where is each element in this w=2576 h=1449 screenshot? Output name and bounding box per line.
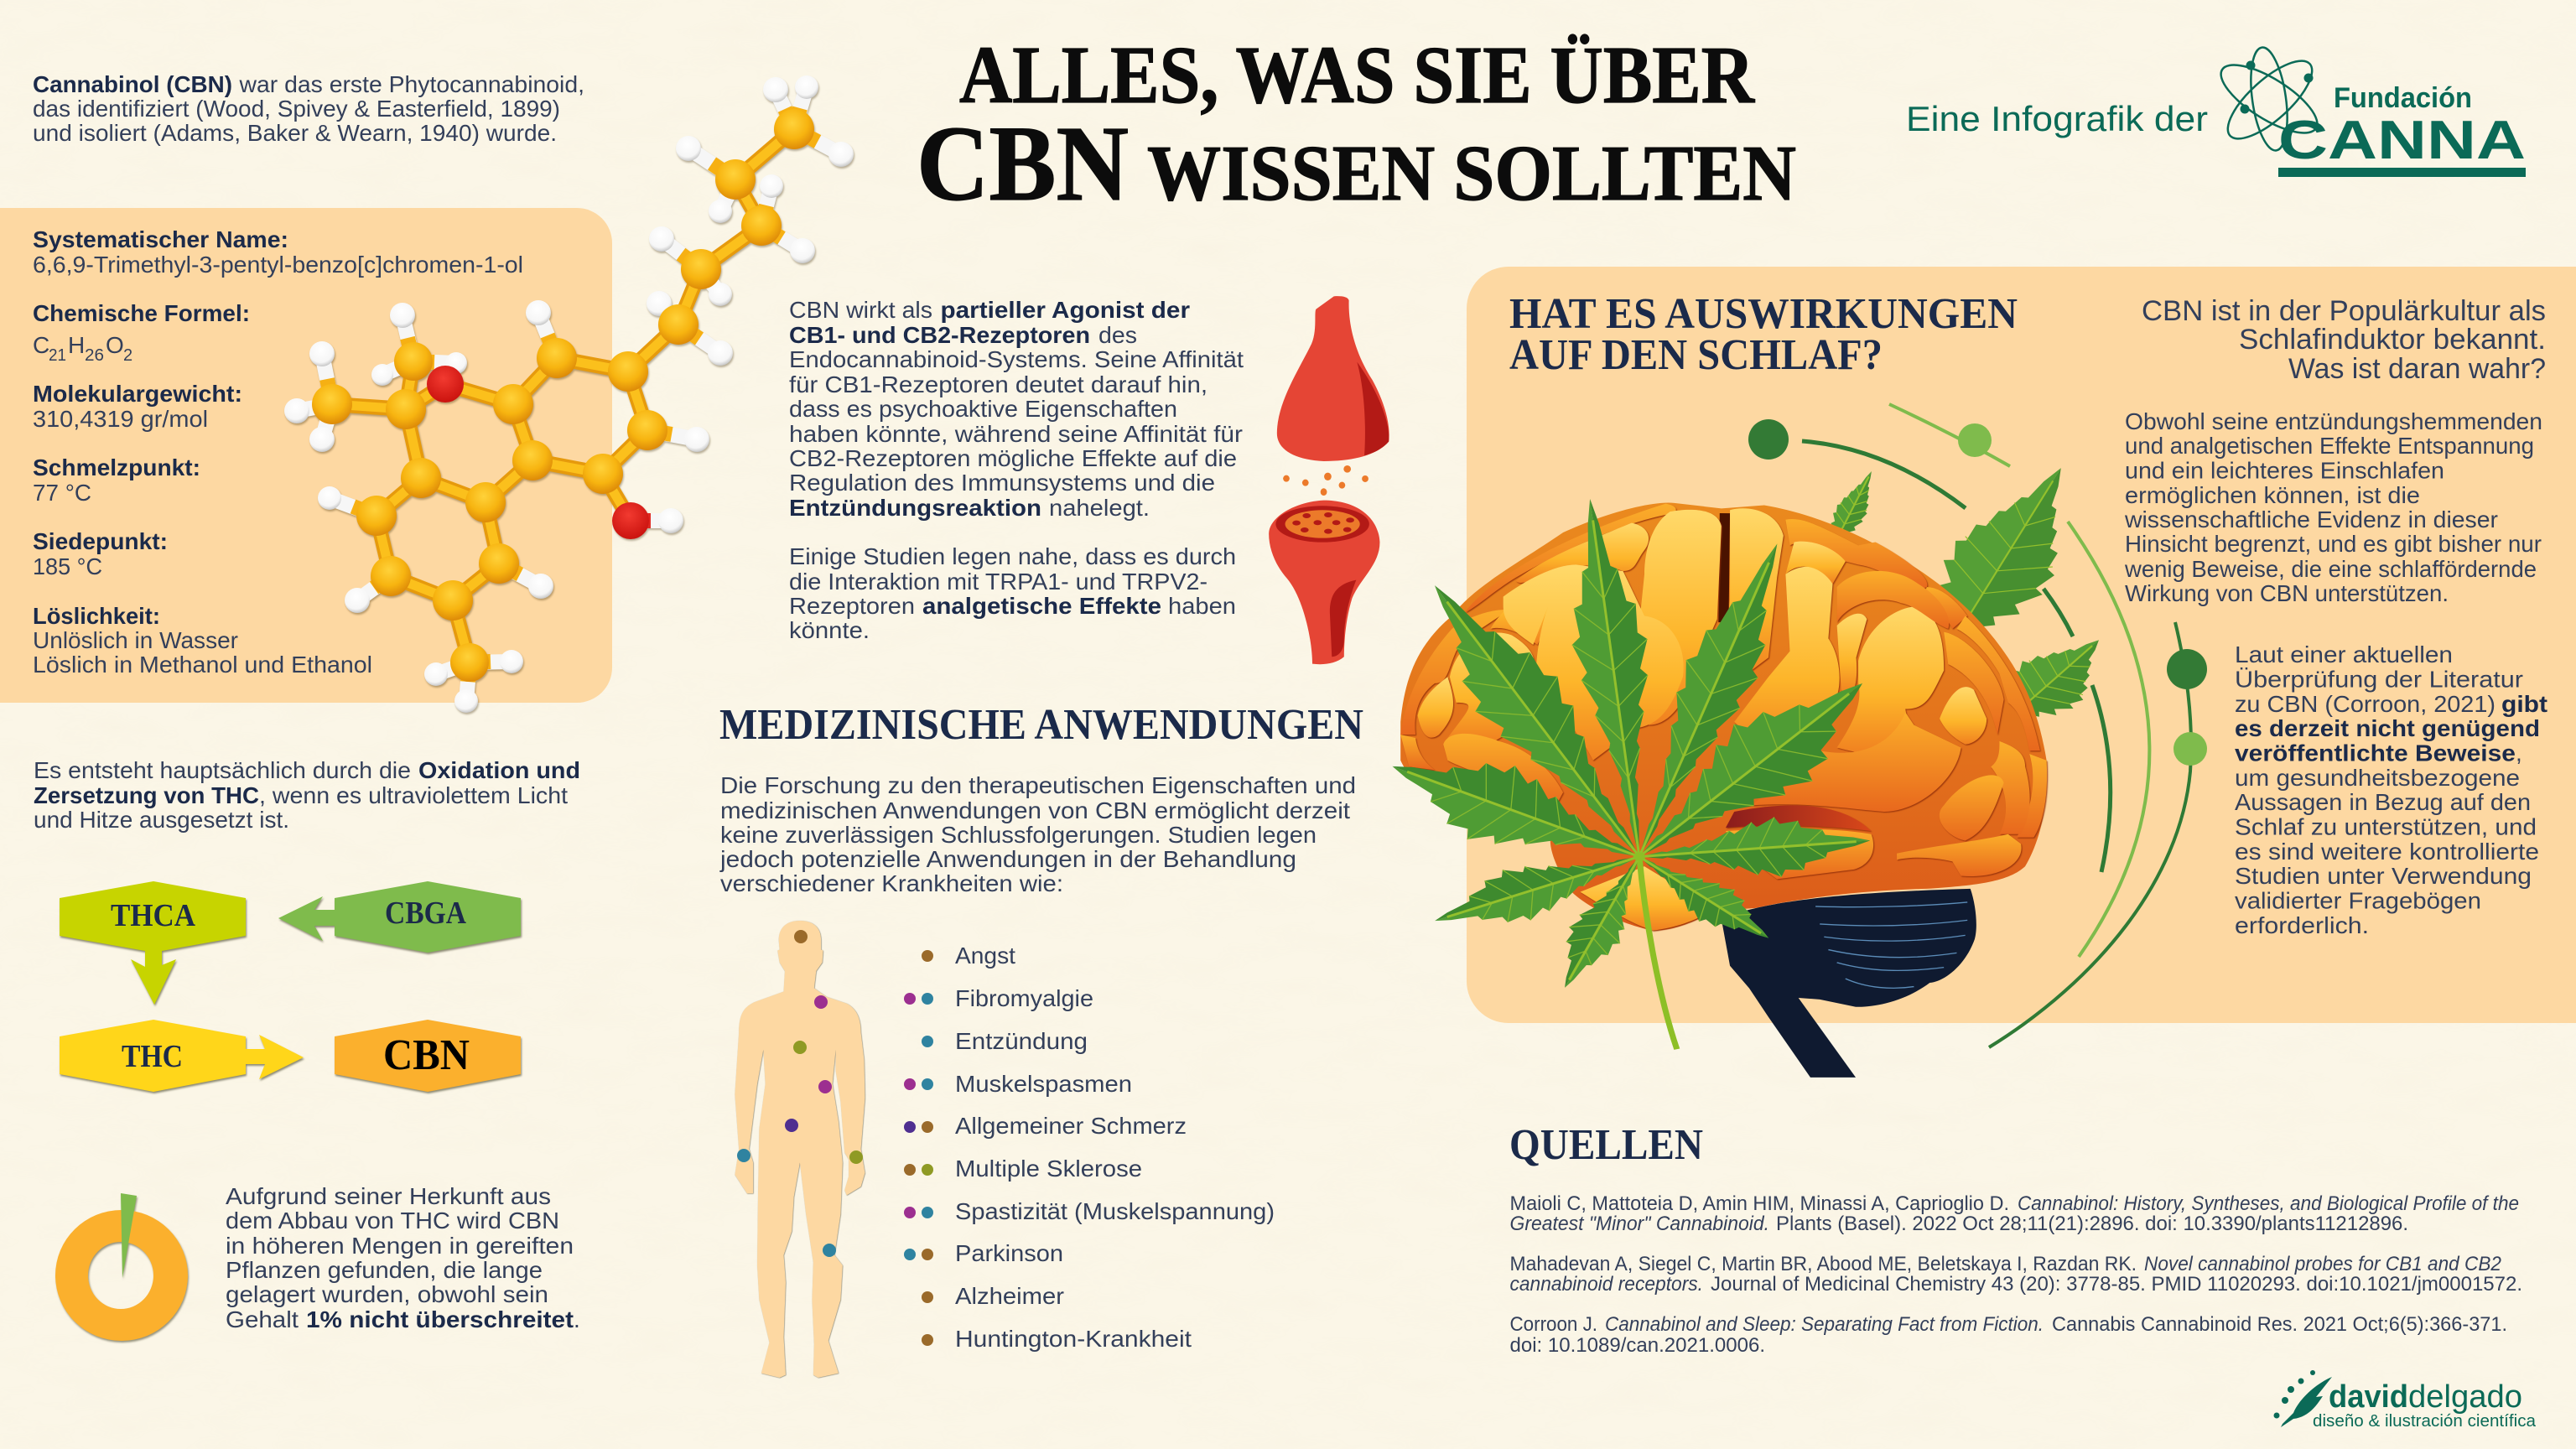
logo: david delgado: diseño & ilustración científica [2313,1412,2537,1431]
text: medical applications: Die Forschung zu den therapeutischen Eigenschaften und [720,772,1356,798]
node: THCA with arrow [60,881,246,1005]
text: references: Greatest "Minor" Cannabinoid. [1509,1213,1769,1235]
text: literature review: es derzeit nicht genügend [2235,715,2540,741]
list: conditions: Angst [955,943,1015,969]
panel: sleep [1467,267,2576,1023]
text: mechanism: des [1098,322,1137,348]
text: references: cannabinoid receptors. [1509,1273,1703,1296]
text: sleep question: CBN ist in der Populärkultur als [2142,295,2546,327]
chemical properties list: Molekulargewicht: [33,381,242,407]
list: conditions: Spastizität (Muskelspannung) [955,1198,1275,1224]
text: formation: , wenn es ultraviolettem Licht [259,782,568,808]
text: 1 percent: dem Abbau von THC wird CBN [226,1208,559,1233]
intro text [33,71,584,146]
text: mechanism: haben könnte, während seine Affinität für [789,421,1243,447]
text: references: Novel cannabinol probes for CB1 and CB2 [2144,1253,2501,1275]
chemical properties list: 26 [85,346,104,365]
chemical properties list: 310,4319 gr/mol [33,406,208,432]
chemical properties list: 185 °C [33,553,102,579]
text: 1 percent: Aufgrund seiner Herkunft aus [226,1183,551,1209]
text: sleep evidence: und ein leichteres Einschlafen [2125,458,2444,483]
text: formation [34,757,580,833]
chemical properties list [33,226,523,678]
chemical properties list: O [106,332,124,358]
text: medical applications: keine zuverlässigen Schlussfolgerungen. Studien legen [720,822,1317,848]
fissure [1723,513,1725,622]
list: conditions: Huntington-Krankheit [955,1326,1192,1352]
text: literature review: Laut einer aktuellen [2235,641,2453,667]
chemical properties list: Löslichkeit: [33,603,160,629]
chemical properties list: H [68,332,85,358]
text: literature review [2235,641,2547,938]
node: THC with arrow: THC [122,1039,183,1074]
text: mechanism: haben [1168,593,1236,619]
cannabis leaf [1368,496,1902,1049]
node: THCA with arrow: THCA [111,898,196,933]
gyri [1400,504,2047,931]
text: literature review: gibt [2501,691,2547,717]
flow diagram: THCA CBGA THC CBN [60,881,521,1092]
text: formation: Oxidation und [418,757,580,783]
list: conditions: Allgemeiner Schmerz [955,1113,1187,1139]
text: mechanism: Rezeptoren [789,593,915,619]
logo: Fundación CANNA [1906,45,2526,177]
text: sleep evidence: wenig Beweise, die eine schlaffördernde [2124,556,2537,582]
text: literature review: zu CBN (Corroon, 2021) [2235,691,2496,717]
text: literature review: es sind weitere kontrollierte [2235,839,2539,865]
text: references: Cannabinol and Sleep: Separating Fact from Fiction. [1605,1313,2044,1336]
icon: synapse [1269,296,1389,664]
text: sleep evidence: ermöglichen können, ist die [2125,482,2420,508]
text: mechanism: CBN wirkt als [789,297,932,323]
text: 1 percent: 1% nicht überschreitet [306,1306,574,1332]
text: mechanism: Regulation des Immunsystems und die [789,470,1215,496]
node: CBN [335,1020,521,1092]
text: literature review: validierter Fragebögen [2235,887,2481,914]
illustration: brain and cannabis leaf [1368,450,2129,1078]
heading: sleep: HAT ES AUSWIRKUNGEN [1509,290,2018,338]
text: mechanism: CB1- und CB2-Rezeptoren [789,322,1090,348]
chemical properties list: Systematischer Name: [33,226,288,252]
text: 1 percent: gelagert wurden, obwohl sein [226,1281,548,1307]
logo: david delgado [2274,1370,2537,1431]
text: references: Mahadevan A, Siegel C, Martin BR, Abood ME, Beletskaya I, Razdan RK. [1509,1253,2137,1275]
chemical properties list: 2 [123,346,132,365]
logo: Fundación CANNA: Eine Infografik der [1906,99,2208,138]
title [917,30,1796,223]
cerebrum base [1400,503,2047,931]
text: references: Maioli C, Mattoteia D, Amin HIM, Minassi A, Caprioglio D. [1509,1192,2009,1215]
heading: sleep: AUF DEN SCHLAF? [1509,331,1883,379]
chemical properties list: Chemische Formel: [33,300,250,326]
text: literature review: , [2516,740,2522,766]
text: references: doi: 10.1089/can.2021.0006. [1509,1334,1765,1357]
text: mechanism: die Interaktion mit TRPA1- und TRPV2- [789,569,1208,595]
node: CBN: CBN [383,1031,470,1079]
text: 1 percent: . [574,1306,580,1332]
text: references: Journal of Medicinal Chemistry 43 (20): 3778-85. PMID 11020293. doi:10.1021/jm0001572. [1711,1273,2522,1296]
text: references: Cannabis Cannabinoid Res. 2021 Oct;6(5):366-371. [2052,1313,2507,1336]
donut chart: 1% [55,1193,188,1341]
panel: chemical properties [0,208,612,703]
background leaves [1822,450,2129,732]
list: conditions: Parkinson [955,1240,1063,1266]
chemical properties list: Siedepunkt: [33,528,168,554]
text: literature review: Schlaf zu unterstützen, und [2235,813,2537,840]
text: references: Plants (Basel). 2022 Oct 28;11(21):2896. doi: 10.3390/plants11212896. [1776,1213,2408,1235]
text: medical applications: medizinischen Anwendungen von CBN ermöglicht derzeit [720,797,1350,823]
text: literature review: erforderlich. [2235,912,2369,938]
chemical properties list: 21 [49,346,66,365]
title: CBN [917,104,1129,223]
text: references: Corroon J. [1509,1313,1597,1336]
text: mechanism: analgetische Effekte [922,593,1161,619]
text: formation: Es entsteht hauptsächlich durch die [34,757,411,783]
text: sleep question: Was ist daran wahr? [2288,353,2546,385]
logo: david delgado: david [2329,1379,2408,1415]
list: conditions: Multiple Sklerose [955,1156,1142,1182]
text: sleep question [2142,295,2546,385]
text: formation: und Hitze ausgesetzt ist. [34,807,289,833]
text: 1 percent [226,1183,580,1332]
text: medical applications: jedoch potenzielle Anwendungen in der Behandlung [719,846,1296,872]
text: literature review: Aussagen in Bezug auf den [2235,789,2531,815]
cerebellum and brain stem [1722,889,1976,1078]
text: sleep evidence: und analgetischen Effekte Entspannung [2125,433,2534,459]
text: mechanism: Endocannabinoid-Systems. Seine Affinität [789,346,1244,372]
chemical properties list: Unlöslich in Wasser [33,627,238,653]
chemical properties list: 6,6,9-Trimethyl-3-pentyl-benzo[c]chromen-1-ol [33,252,523,278]
list: conditions: Entzündung [955,1028,1088,1054]
text: mechanism: könnte. [789,617,870,643]
text: literature review: Überprüfung der Literatur [2235,666,2523,693]
text: 1 percent: Pflanzen gefunden, die lange [226,1257,543,1283]
node: CBGA with arrow: CBGA [385,896,466,931]
chemical properties list: C [33,332,49,358]
list: conditions: Alzheimer [955,1283,1064,1309]
heading: sources: QUELLEN [1509,1121,1703,1169]
figure: human body with markers [735,921,865,1378]
logo: Fundación CANNA: Fundación [2334,82,2472,114]
orbit arcs and dots [1748,404,2207,1047]
intro text: Cannabinol (CBN) [33,71,232,97]
text: sleep evidence: wissenschaftliche Evidenz in dieser [2124,506,2498,532]
molecule: CBN ball and stick [284,75,854,713]
chemical properties list: Löslich in Methanol und Ethanol [33,652,372,678]
text: formation: Zersetzung von THC [34,782,259,808]
text: mechanism: für CB1-Rezeptoren deutet darauf hin, [789,371,1208,397]
text: mechanism: dass es psychoaktive Eigenschaften [789,396,1177,422]
chemical properties list: Schmelzpunkt: [33,454,200,480]
node: CBGA with arrow [278,881,521,953]
logo: Fundación CANNA: CANNA [2278,109,2526,170]
text: literature review: Studien unter Verwendung [2235,863,2532,889]
intro text: und isoliert (Adams, Baker & Wearn, 1940) wurde. [33,120,557,146]
text: sleep evidence [2124,408,2542,606]
list: conditions [904,943,1275,1352]
title: WISSEN SOLLTEN [1147,130,1796,217]
heading: sleep [1509,290,2018,379]
intro text: war das erste Phytocannabinoid, [238,71,584,97]
text: mechanism: nahelegt. [1049,495,1150,521]
text: sleep evidence: Obwohl seine entzündungshemmenden [2125,408,2542,434]
logo: david delgado: delgado [2408,1379,2522,1415]
text: sleep evidence: Hinsicht begrenzt, und es gibt bisher nur [2125,531,2542,557]
text: references: Cannabinol: History, Syntheses, and Biological Profile of the [2018,1192,2519,1215]
text: 1 percent: Gehalt [226,1306,299,1332]
text: mechanism: Einige Studien legen nahe, dass es durch [789,543,1236,569]
text: references [1509,1192,2522,1357]
text: mechanism: Entzündungsreaktion [789,495,1041,521]
text: medical applications: verschiedener Krankheiten wie: [720,870,1063,896]
heading: medical applications: MEDIZINISCHE ANWENDUNGEN [719,701,1363,749]
text: mechanism [789,297,1244,643]
chemical properties list: 77 °C [33,480,91,506]
list: conditions: Fibromyalgie [955,985,1093,1011]
text: mechanism: partieller Agonist der [941,297,1190,323]
title: ALLES, WAS SIE ÜBER [959,30,1755,120]
node: THC with arrow [60,1020,304,1092]
text: sleep evidence: Wirkung von CBN unterstützen. [2125,580,2449,606]
text: mechanism: CB2-Rezeptoren mögliche Effekte auf die [789,445,1237,471]
text: 1 percent: in höheren Mengen in gereiften [226,1233,574,1259]
list: conditions: Muskelspasmen [955,1071,1132,1097]
text: literature review: um gesundheitsbezogene [2235,765,2520,791]
text: medical applications [719,772,1356,896]
text: sleep question: Schlafinduktor bekannt. [2239,324,2546,356]
intro text: das identifiziert (Wood, Spivey & Easterfield, 1899) [33,96,560,122]
text: literature review: veröffentlichte Beweise [2235,740,2516,766]
